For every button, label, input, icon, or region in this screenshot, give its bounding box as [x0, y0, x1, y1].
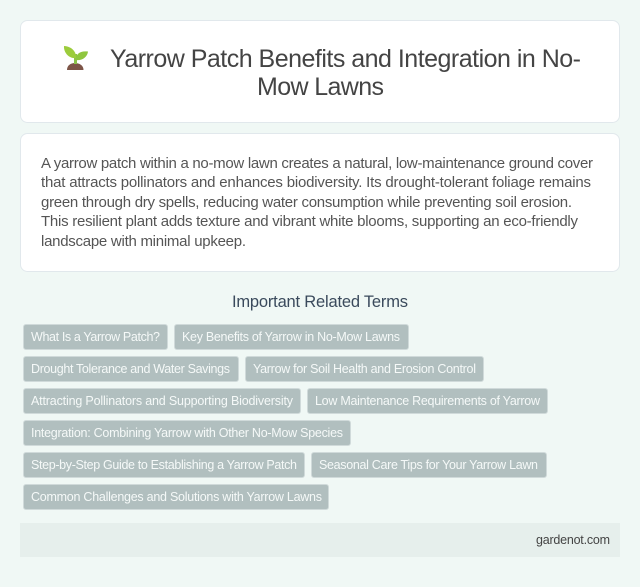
chip: low maintenance: Low Maintenance Requirements of Yarrow: [315, 394, 541, 408]
footer: gardenot.com: [536, 533, 610, 547]
icon: seedling: [64, 46, 88, 70]
chip: seasonal care: Seasonal Care Tips for Your Yarrow Lawn: [319, 458, 538, 472]
text block: description: that attracts pollinators and enhances biodiversity. Its drought-tolerant foliage remains: [41, 174, 591, 191]
title: [110, 45, 581, 101]
chip: key benefits: [174, 324, 408, 350]
panel: related term chips: [24, 324, 548, 510]
chip: low maintenance: [308, 388, 548, 414]
chip: soil health: [246, 356, 484, 382]
text block: description: A yarrow patch within a no-mow lawn creates a natural, low-maintenance ground cover: [41, 155, 593, 172]
chip: drought tolerance: Drought Tolerance and Water Savings: [31, 362, 230, 376]
panel: title card: [20, 20, 620, 122]
title: Mow Lawns: [257, 73, 384, 101]
chip: what is a yarrow patch: What Is a Yarrow Patch?: [31, 330, 160, 344]
chip: integration: Integration: Combining Yarrow with Other No-Mow Species: [31, 426, 343, 440]
chip: what is a yarrow patch: [24, 324, 168, 350]
panel: description card: [20, 134, 620, 272]
text block: description: green through dry spells, reducing water consumption while preventing soil erosion.: [41, 194, 572, 211]
chip: common challenges: Common Challenges and Solutions with Yarrow Lawns: [31, 490, 322, 504]
chip: drought tolerance: [24, 356, 238, 382]
chip: key benefits: Key Benefits of Yarrow in No-Mow Lawns: [182, 330, 400, 344]
title: Yarrow Patch Benefits and Integration in No-: [110, 45, 581, 73]
chip: integration: [24, 420, 350, 446]
footer: [20, 523, 620, 557]
chip: common challenges: [24, 484, 328, 510]
chip: soil health: Yarrow for Soil Health and Erosion Control: [253, 362, 476, 376]
chip: step-by-step guide: [24, 452, 304, 478]
text block: description: [41, 155, 593, 250]
heading: important related terms: Important Related Terms: [232, 293, 408, 311]
chip: attracting pollinators: Attracting Pollinators and Supporting Biodiversity: [31, 394, 294, 408]
chip: seasonal care: [312, 452, 546, 478]
chip: attracting pollinators: [24, 388, 300, 414]
text block: description: landscape with minimal upkeep.: [41, 233, 246, 250]
chip: step-by-step guide: Step-by-Step Guide to Establishing a Yarrow Patch: [31, 458, 297, 472]
text block: description: This resilient plant adds texture and vibrant white blooms, supporting an eco-friendly: [41, 213, 578, 230]
